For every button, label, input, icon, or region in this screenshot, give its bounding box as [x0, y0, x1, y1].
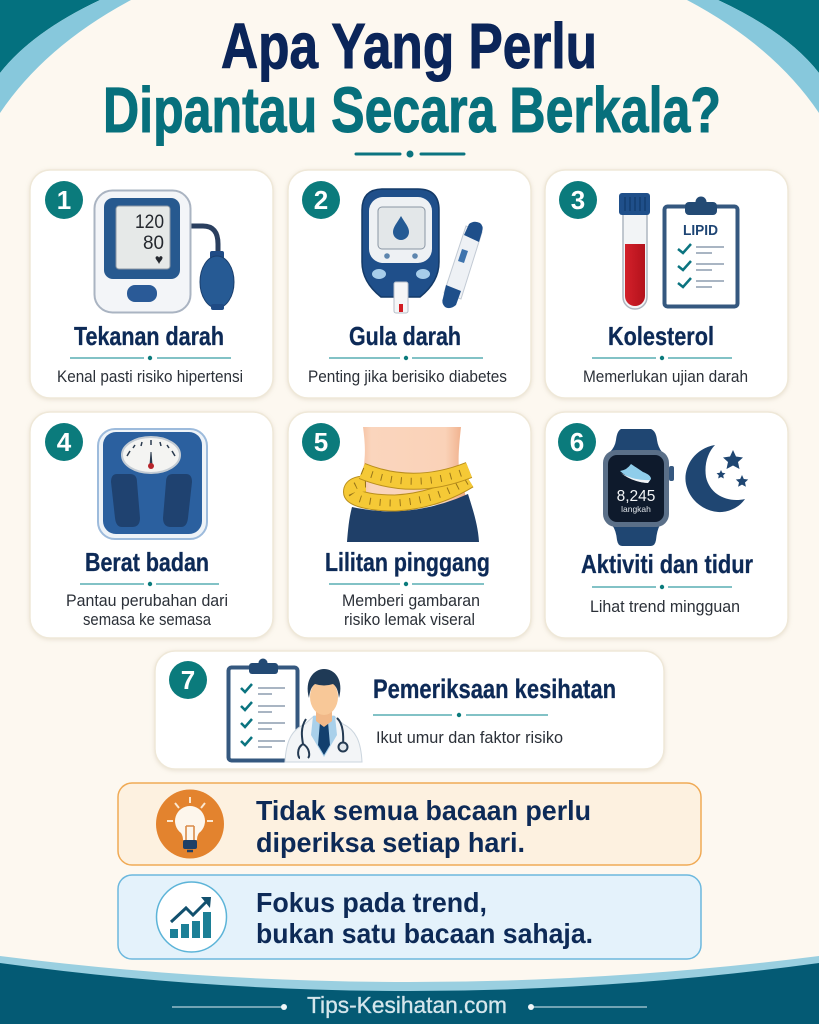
icon: weighing scale [98, 429, 207, 539]
panel: aktiviti dan tidur [545, 412, 788, 638]
badge 7 [169, 661, 207, 699]
description: Memberi gambaran [342, 592, 480, 610]
footer text [172, 992, 647, 1018]
panel: gula darah [288, 170, 531, 398]
description: semasa ke semasa [83, 611, 212, 629]
title [103, 10, 721, 146]
icon: blood pressure monitor: 80 [143, 233, 164, 254]
panel: lilitan pinggang [288, 412, 531, 638]
icon: doctor [285, 669, 362, 762]
badge 6 [558, 423, 596, 461]
panel: pemeriksaan kesihatan [155, 651, 664, 769]
description: Memerlukan ujian darah [583, 368, 748, 386]
icon: lancet pen [442, 222, 483, 308]
title: Apa Yang Perlu [221, 10, 597, 82]
description: Penting jika berisiko diabetes [308, 368, 507, 386]
description: Pantau perubahan dari [66, 592, 228, 610]
footer text: Tips-Kesihatan.com [307, 992, 507, 1018]
badge 2: 2 [314, 185, 328, 215]
heading: Gula darah [349, 321, 461, 351]
icon: smartwatch [603, 429, 674, 546]
heading: Pemeriksaan kesihatan [373, 674, 616, 704]
badge 7: 7 [181, 665, 195, 695]
callout text: Tidak semua bacaan perlu [256, 795, 591, 826]
panel: kolesterol [545, 170, 788, 398]
badge 6: 6 [570, 427, 584, 457]
divider [70, 356, 231, 360]
heading: Lilitan pinggang [325, 547, 490, 577]
panel: berat badan [30, 412, 273, 638]
footer band [0, 956, 819, 1024]
icon: waist with measuring tape [347, 427, 479, 542]
icon: smartwatch: langkah [621, 504, 651, 514]
header corner: left [0, 0, 131, 113]
divider [329, 582, 484, 586]
icon: test tube [619, 193, 650, 309]
callout text [256, 887, 593, 949]
divider [80, 582, 219, 586]
callout: fokus pada trend [118, 875, 701, 959]
icon: blood pressure monitor: 120 [135, 212, 164, 233]
icon: moon and stars [685, 445, 748, 512]
header corner: right [687, 0, 819, 113]
description: Lihat trend mingguan [590, 598, 740, 616]
badge 4: 4 [57, 427, 72, 457]
description: Ikut umur dan faktor risiko [376, 729, 563, 747]
heading: Aktiviti dan tidur [581, 549, 753, 579]
heading: Tekanan darah [74, 321, 224, 351]
divider [329, 356, 483, 360]
divider [373, 713, 548, 717]
icon: lipid clipboard [664, 196, 738, 306]
icon: light bulb [156, 790, 224, 858]
badge 3: 3 [571, 185, 585, 215]
icon: blood pressure monitor: ♥ [155, 251, 163, 267]
callout: tidak semua bacaan [118, 783, 701, 865]
badge 5 [302, 423, 340, 461]
description: Kenal pasti risiko hipertensi [57, 368, 243, 386]
icon: trend chart [156, 882, 226, 952]
description: risiko lemak viseral [344, 611, 475, 629]
icon: glucose meter [362, 189, 439, 313]
badge 1: 1 [57, 185, 71, 215]
heading: Kolesterol [608, 321, 714, 351]
callout text: Fokus pada trend, [256, 887, 487, 918]
badge 4 [45, 423, 83, 461]
icon: lipid clipboard: LIPID [683, 223, 718, 239]
description [342, 592, 480, 629]
divider [592, 356, 732, 360]
icon: blood pressure monitor [94, 190, 234, 312]
callout text: diperiksa setiap hari. [256, 827, 525, 858]
callout text: bukan satu bacaan sahaja. [256, 918, 593, 949]
badge 3 [559, 181, 597, 219]
badge 1 [45, 181, 83, 219]
title divider [356, 150, 464, 158]
description [66, 592, 228, 629]
panel: tekanan darah [30, 170, 273, 398]
badge 5: 5 [314, 427, 328, 457]
heading: Berat badan [85, 547, 209, 577]
divider [592, 585, 732, 589]
icon: smartwatch: 8,245 [617, 488, 655, 505]
callout text [256, 795, 591, 858]
badge 2 [302, 181, 340, 219]
icon: checklist clipboard [228, 658, 298, 760]
